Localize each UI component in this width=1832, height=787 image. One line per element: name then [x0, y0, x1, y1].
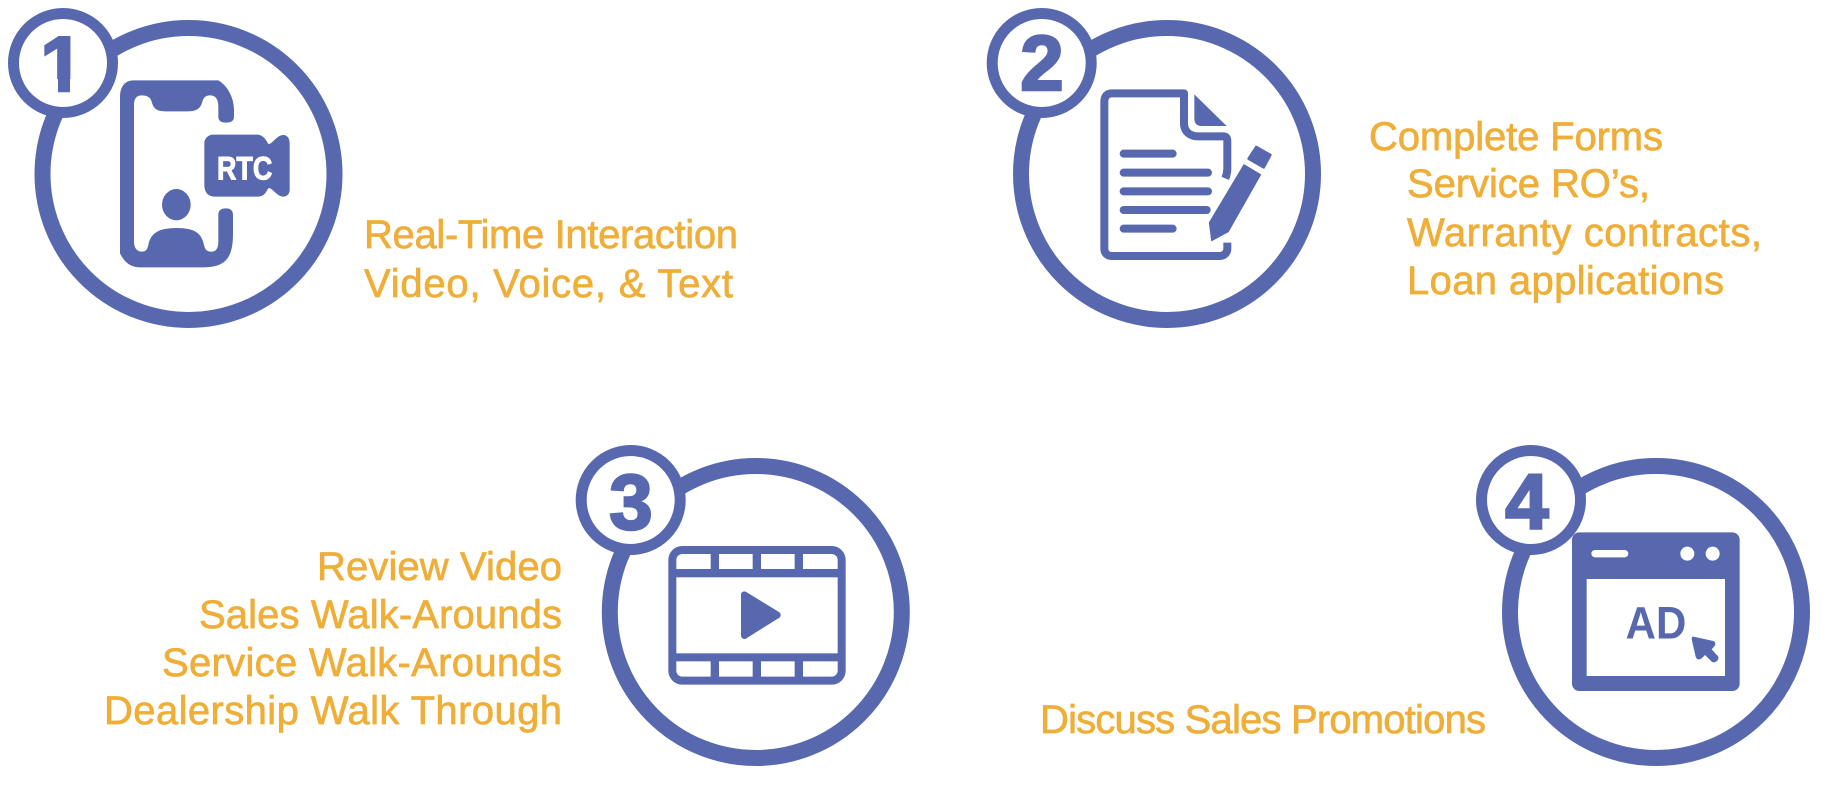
badge: number 1: [14, 14, 112, 112]
ring: step 3: [610, 466, 902, 758]
text: complete forms list: Complete Forms: [1369, 115, 1663, 159]
badge: number 3: 3: [609, 458, 653, 546]
ring: step 1: [42, 28, 334, 320]
icon: browser window with ad and cursor: [1572, 532, 1740, 691]
text: review video list: [104, 545, 562, 733]
badge: number 4: [1482, 450, 1580, 550]
badge: number 4: 4: [1505, 458, 1549, 546]
text: real-time interaction: Video, Voice, & Text: [364, 262, 733, 306]
ring: step 4: [1510, 466, 1802, 758]
icon: browser window with ad and cursor: AD: [1626, 598, 1686, 649]
text: review video list: Service Walk-Arounds: [162, 641, 562, 685]
badge: number 2: 2: [1020, 19, 1064, 107]
ring: step 2: [1021, 28, 1313, 320]
text: review video list: Review Video: [317, 545, 562, 589]
text: real-time interaction: [364, 213, 738, 306]
panel: step 2 complete forms: [992, 14, 1762, 320]
panel: step 4 sales promotions: [1040, 450, 1802, 758]
text: complete forms list: Warranty contracts,: [1407, 211, 1762, 255]
text: real-time interaction: Real-Time Interaction: [364, 213, 738, 257]
text: complete forms list: [1369, 115, 1762, 303]
text: complete forms list: Service RO’s,: [1407, 162, 1650, 206]
text: discuss sales promotions: Discuss Sales Promotions: [1040, 698, 1486, 742]
badge: number 1: 1: [40, 20, 84, 108]
icon: film strip with play button: [672, 550, 842, 681]
text: review video list: Sales Walk-Arounds: [199, 593, 562, 637]
text: review video list: Dealership Walk Through: [104, 689, 562, 733]
badge: number 2: [992, 14, 1091, 112]
icon: phone with RTC video camera: [120, 80, 290, 267]
panel: step 3 review video: [104, 450, 902, 758]
badge: number 3: [581, 450, 680, 550]
icon: phone with RTC video camera: RTC: [217, 151, 272, 187]
text: complete forms list: Loan applications: [1407, 259, 1724, 303]
icon: document with pencil: [1104, 93, 1270, 256]
panel: step 1 real-time interaction: [14, 14, 738, 320]
